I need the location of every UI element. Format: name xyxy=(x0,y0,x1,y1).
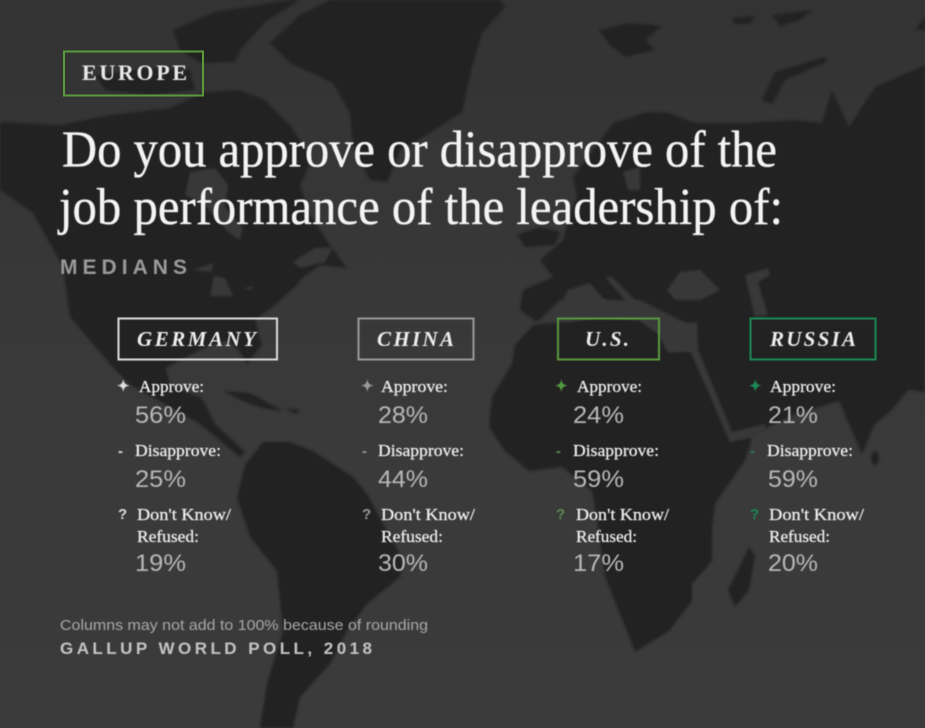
panel: China xyxy=(358,318,475,577)
water: Great Lakes xyxy=(193,263,253,296)
water: Gulf of St. Lawrence xyxy=(293,247,333,268)
don't know row: 17% xyxy=(573,550,624,577)
don't know row: Don't Know/ xyxy=(137,505,231,524)
approve row: Approve: xyxy=(139,377,204,396)
panel: Russia xyxy=(749,318,876,577)
don't know row: Refused: xyxy=(137,527,199,546)
map: Arctic islands xyxy=(95,0,300,95)
map: North America xyxy=(0,90,347,457)
disapprove row xyxy=(556,441,659,493)
title: job performance of the leadership of: xyxy=(57,179,783,236)
disapprove row xyxy=(362,441,464,493)
map: Madagascar xyxy=(728,547,755,607)
map water bodies xyxy=(185,167,770,442)
disapprove row xyxy=(750,441,853,493)
approve row: ✦ xyxy=(555,378,568,395)
map: Eurasia xyxy=(520,65,925,454)
disapprove row: Disapprove: xyxy=(767,441,853,460)
panel: U.S. xyxy=(555,318,669,577)
don't know row xyxy=(118,505,231,577)
water: Hudson Bay xyxy=(185,168,243,240)
disapprove row: Disapprove: xyxy=(573,441,659,460)
subtitle: medians: MEDIANS xyxy=(60,256,187,279)
don't know row: Refused: xyxy=(381,527,443,546)
don't know row: Don't Know/ xyxy=(381,505,475,524)
disapprove row: 59% xyxy=(768,466,818,493)
approve row: 24% xyxy=(573,402,624,429)
country tag xyxy=(558,318,659,360)
water: Caspian Sea xyxy=(745,268,770,317)
map: Svalbard and Arctic Russian islands xyxy=(599,10,925,104)
don't know row: ? xyxy=(362,506,371,523)
disapprove row: 25% xyxy=(135,466,186,493)
country tag: CHINA xyxy=(377,327,454,351)
source: GALLUP WORLD POLL, 2018 xyxy=(60,639,372,658)
approve row: 28% xyxy=(378,402,428,429)
don't know row: ? xyxy=(556,506,565,523)
country tag: GERMANY xyxy=(137,327,258,351)
region tag: EUROPE xyxy=(64,52,203,96)
region tag: EUROPE: EUROPE xyxy=(82,60,187,85)
approve row: ✦ xyxy=(117,378,130,395)
approve row: 21% xyxy=(768,402,818,429)
don't know row: 30% xyxy=(378,550,428,577)
title: Do you approve or disapprove of the xyxy=(62,122,777,178)
water: Adriatic xyxy=(605,277,640,308)
approve row: Approve: xyxy=(770,377,836,396)
disapprove row: Disapprove: xyxy=(378,441,464,460)
country tag xyxy=(358,318,474,360)
map: South America xyxy=(237,442,403,728)
country tag xyxy=(750,318,876,360)
water: Black Sea xyxy=(667,270,720,300)
country tag: RUSSIA xyxy=(769,327,856,351)
map: Greenland xyxy=(270,0,505,182)
don't know row: 20% xyxy=(768,550,818,577)
disapprove row xyxy=(118,441,221,493)
don't know row xyxy=(362,505,475,577)
approve row xyxy=(361,377,448,429)
disapprove row: - xyxy=(362,443,367,460)
don't know row xyxy=(556,505,669,577)
map: Cuba and Caribbean xyxy=(223,391,300,414)
panel: Germany xyxy=(117,318,277,577)
disapprove row: - xyxy=(556,443,561,460)
country tag xyxy=(118,318,277,360)
approve row: Approve: xyxy=(577,377,642,396)
disapprove row: - xyxy=(750,443,755,460)
don't know row: ? xyxy=(750,506,759,523)
don't know row xyxy=(750,505,864,577)
disapprove row: - xyxy=(118,443,123,460)
disapprove row: Disapprove: xyxy=(135,441,221,460)
map: Sri Lanka xyxy=(871,451,879,465)
country tag: U.S. xyxy=(585,327,629,351)
don't know row: Don't Know/ xyxy=(576,505,669,524)
approve row: ✦ xyxy=(361,378,374,395)
disapprove row: 59% xyxy=(573,466,624,493)
don't know row: Don't Know/ xyxy=(769,505,864,524)
footnote: Columns may not add to 100% because of rounding xyxy=(60,617,428,634)
approve row: ✦ xyxy=(749,378,762,395)
approve row: Approve: xyxy=(381,377,448,396)
water: Red Sea and Gulf of Aden xyxy=(688,345,765,442)
approve row xyxy=(749,377,836,429)
don't know row: Refused: xyxy=(769,527,830,546)
don't know row: ? xyxy=(118,506,127,523)
title xyxy=(57,122,783,236)
disapprove row: 44% xyxy=(378,466,428,493)
approve row xyxy=(555,377,642,429)
don't know row: 19% xyxy=(135,550,186,577)
map: British Isles xyxy=(517,227,560,247)
approve row: 56% xyxy=(135,402,186,429)
map: Africa xyxy=(489,318,752,652)
water: Mediterranean xyxy=(545,283,698,352)
don't know row: Refused: xyxy=(576,527,637,546)
approve row xyxy=(117,377,204,429)
water: Baltic Sea xyxy=(623,167,640,190)
